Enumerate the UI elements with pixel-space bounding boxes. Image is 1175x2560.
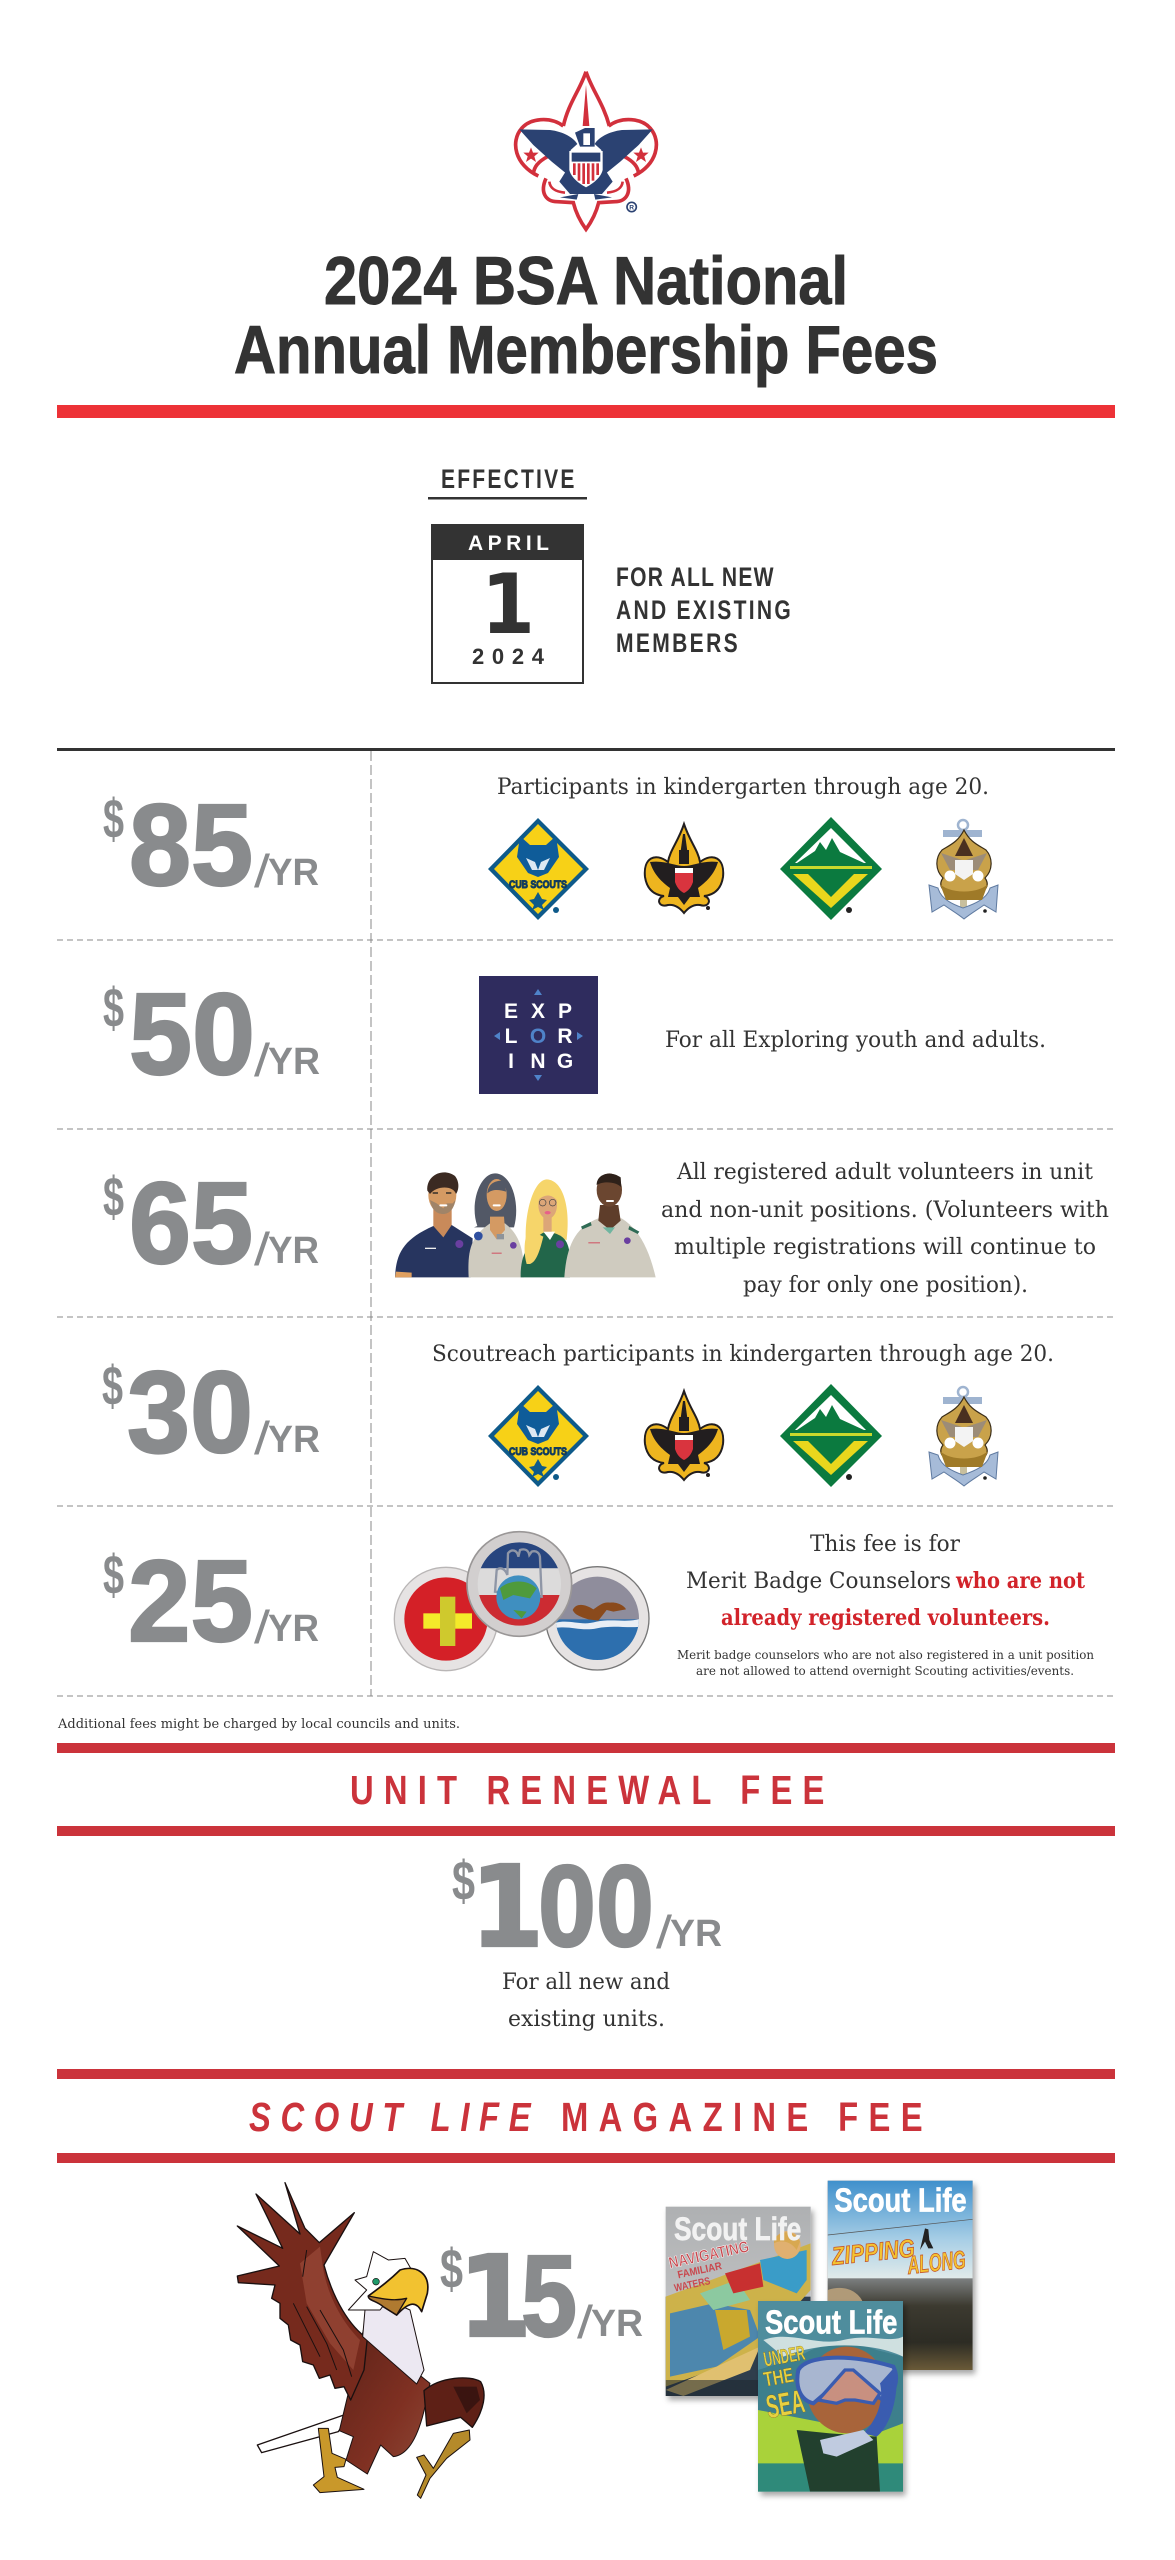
icon: Exploring logo: X bbox=[531, 1000, 545, 1023]
footnote: Additional fees might be charged by local councils and units. bbox=[57, 1717, 460, 1732]
cover: under the sea: UNDER bbox=[762, 2342, 807, 2372]
row 2 text: For all Exploring youth and adults. bbox=[665, 1028, 1046, 1053]
price: $65/yr: YR bbox=[268, 1230, 319, 1272]
calendar: April 1 2024: 1 bbox=[481, 556, 535, 653]
icon: Sea Scouts anchor bbox=[929, 820, 998, 919]
heading: Scout Life magazine fee bbox=[57, 2069, 1115, 2163]
price: $15/yr: 5 bbox=[521, 2231, 577, 2361]
cover: navigating familiar waters: NAVIGATING bbox=[667, 2239, 751, 2272]
price: $85/yr: YR bbox=[268, 852, 319, 894]
title: 2024 BSA National bbox=[324, 243, 848, 319]
cover: zipping along bbox=[828, 2181, 973, 2370]
icon: Sea Scouts anchor (Scoutreach) bbox=[929, 1387, 998, 1486]
cover: navigating familiar waters: Scout Life bbox=[674, 2210, 801, 2247]
price: $65/yr: $ bbox=[103, 1165, 124, 1228]
row 3 text: All registered adult volunteers in unit bbox=[676, 1160, 1093, 1185]
price: $25/yr: 25 bbox=[128, 1536, 253, 1666]
icon: Exploring logo: R bbox=[557, 1025, 573, 1048]
price: $100/yr: $ bbox=[452, 1849, 475, 1912]
icon: Cub Scouts diamond bbox=[488, 818, 589, 920]
row 5 text: This fee is for bbox=[810, 1532, 960, 1557]
calendar: April 1 2024 bbox=[431, 524, 584, 683]
icon: Venturing diamond bbox=[780, 817, 882, 920]
price: $25/yr: / bbox=[254, 1601, 270, 1653]
price: $100/yr bbox=[452, 1841, 722, 1973]
cover: zipping along: ALONG bbox=[905, 2246, 967, 2280]
price: $25/yr bbox=[103, 1536, 319, 1666]
icon: Exploring logo: E bbox=[504, 1000, 518, 1023]
price: $15/yr: / bbox=[577, 2296, 593, 2348]
cover: under the sea: Scout Life bbox=[765, 2304, 897, 2341]
cover: under the sea: SEA bbox=[763, 2382, 807, 2425]
price: $50/yr: / bbox=[254, 1034, 270, 1086]
effective label: EFFECTIVE bbox=[441, 465, 574, 495]
row 5 text: Merit badge counselors who are not also registered in a unit position bbox=[677, 1648, 1094, 1662]
price: $85/yr: $ bbox=[103, 787, 124, 850]
calendar: April 1 2024: 2024 bbox=[472, 644, 545, 669]
effective note: FOR ALL NEW bbox=[616, 563, 774, 593]
icon: Exploring logo: N bbox=[530, 1050, 546, 1073]
price: $50/yr: YR bbox=[268, 1041, 320, 1083]
row 4 text: Scoutreach participants in kindergarten through age 20. bbox=[432, 1342, 1054, 1367]
price: $15/yr: YR bbox=[591, 2303, 643, 2345]
row 5 text: are not allowed to attend overnight Scouting activities/events. bbox=[696, 1664, 1074, 1678]
heading: Scout Life magazine fee: MAGAZINE FEE bbox=[561, 2093, 923, 2140]
row 3 text: and non-unit positions. (Volunteers with bbox=[661, 1198, 1109, 1223]
illustration: four adult volunteers bbox=[395, 1172, 656, 1277]
logo: BSA fleur-de-lis: R bbox=[629, 205, 634, 212]
price: $30/yr: 30 bbox=[127, 1347, 253, 1477]
table rules bbox=[57, 748, 1115, 1696]
price: $85/yr: 85 bbox=[129, 780, 253, 910]
cover: under the sea: THE bbox=[762, 2364, 795, 2392]
price: $50/yr: $ bbox=[103, 976, 124, 1039]
icon: Exploring logo bbox=[479, 976, 598, 1094]
row 5 text: already registered volunteers. bbox=[721, 1605, 1050, 1631]
cover: zipping along: Scout Life bbox=[834, 2183, 967, 2220]
title bbox=[234, 243, 938, 388]
row 1 text: Participants in kindergarten through age 20. bbox=[497, 775, 989, 800]
icon: Cub Scouts diamond (Scoutreach) bbox=[488, 1385, 589, 1487]
top red divider bbox=[57, 405, 1115, 418]
effective note: AND EXISTING bbox=[616, 596, 791, 626]
unit fee text: existing units. bbox=[508, 2007, 665, 2032]
icon: merit badges bbox=[394, 1532, 649, 1671]
price: $50/yr bbox=[103, 969, 320, 1099]
illustration: waving eagle bbox=[237, 2183, 484, 2498]
price: $30/yr bbox=[102, 1347, 320, 1477]
icon: Exploring logo: O bbox=[530, 1025, 546, 1048]
cover: navigating familiar waters bbox=[666, 2207, 811, 2397]
icon: Exploring logo: P bbox=[558, 1000, 572, 1023]
heading: unit renewal fee bbox=[57, 1743, 1115, 1836]
effective note: MEMBERS bbox=[616, 629, 738, 659]
price: $30/yr: $ bbox=[102, 1354, 123, 1417]
title: Annual Membership Fees bbox=[234, 312, 938, 388]
row 5 text: Merit Badge Counselors bbox=[686, 1569, 951, 1594]
icon: Cub Scouts diamond: CUB SCOUTS bbox=[509, 879, 567, 891]
cover: under the sea bbox=[758, 2301, 903, 2492]
calendar: April 1 2024: APRIL bbox=[468, 532, 549, 555]
heading: unit renewal fee: UNIT RENEWAL FEE bbox=[350, 1766, 824, 1813]
icon: Exploring logo: I bbox=[508, 1050, 514, 1073]
price: $65/yr bbox=[103, 1158, 319, 1288]
price: $100/yr: 00 bbox=[538, 1841, 654, 1971]
price: $15/yr bbox=[440, 2231, 643, 2363]
unit fee text bbox=[502, 1970, 670, 2032]
price: $65/yr: / bbox=[254, 1223, 270, 1275]
price: $100/yr: / bbox=[656, 1906, 672, 1958]
magazine covers bbox=[666, 2181, 973, 2492]
icon: Exploring logo: G bbox=[557, 1050, 573, 1073]
cover: zipping along: ZIPPING bbox=[830, 2234, 916, 2271]
cover: navigating familiar waters: WATERS bbox=[673, 2275, 711, 2295]
icon: Cub Scouts diamond (Scoutreach): CUB SCOUTS bbox=[509, 1446, 567, 1458]
icon: Exploring logo: L bbox=[505, 1025, 518, 1048]
icon: Venturing diamond (Scoutreach) bbox=[780, 1384, 882, 1487]
price: $100/yr: 1 bbox=[470, 1843, 544, 1973]
price: $85/yr: / bbox=[254, 845, 270, 897]
icon: Scouts BSA fleur (Scoutreach) bbox=[645, 1391, 723, 1480]
row 5 text bbox=[677, 1532, 1094, 1678]
price: $30/yr: YR bbox=[268, 1419, 320, 1461]
price: $25/yr: $ bbox=[103, 1543, 124, 1606]
price: $30/yr: / bbox=[254, 1412, 270, 1464]
price: $100/yr: YR bbox=[670, 1913, 722, 1955]
row 3 text: multiple registrations will continue to bbox=[674, 1235, 1096, 1260]
row 5 text: who are not bbox=[955, 1568, 1086, 1594]
price: $25/yr: YR bbox=[268, 1608, 319, 1650]
row 3 text bbox=[661, 1160, 1109, 1298]
icon: Scouts BSA fleur bbox=[645, 824, 723, 913]
effective note bbox=[616, 563, 791, 659]
cover: navigating familiar waters: FAMILIAR bbox=[676, 2260, 723, 2281]
unit fee text: For all new and bbox=[502, 1970, 670, 1995]
price: $15/yr: 1 bbox=[458, 2233, 532, 2363]
heading: Scout Life magazine fee: SCOUT LIFE bbox=[249, 2093, 532, 2140]
price: $85/yr bbox=[103, 780, 319, 910]
logo: BSA fleur-de-lis bbox=[516, 72, 656, 229]
price: $15/yr: $ bbox=[440, 2237, 463, 2300]
row 3 text: pay for only one position). bbox=[743, 1273, 1028, 1298]
price: $65/yr: 65 bbox=[129, 1158, 253, 1288]
price: $50/yr: 50 bbox=[129, 969, 255, 1099]
